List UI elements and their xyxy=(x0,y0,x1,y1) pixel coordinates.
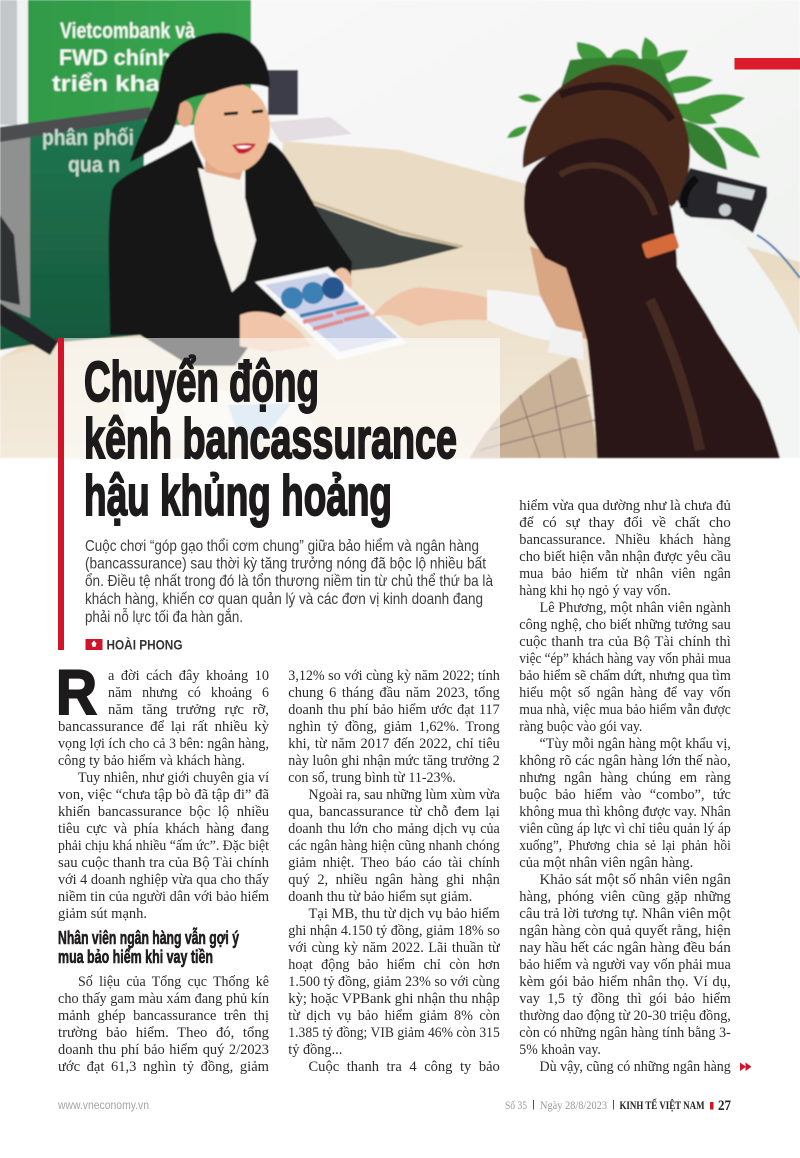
column 2 xyxy=(288,668,501,1075)
column 2: Cuộc thanh tra 4 công ty bảo xyxy=(308,1059,500,1075)
plant xyxy=(507,37,760,170)
intro text xyxy=(85,537,493,626)
footer issue info and page number xyxy=(505,1097,731,1114)
column 3: thường dao động từ 20-30 triệu đồng, xyxy=(519,1008,731,1024)
customer with ponytail xyxy=(470,138,780,458)
column 3: 5% khoản vay. xyxy=(519,1042,601,1058)
column 3: bancassurance. Nhiều khách hàng xyxy=(519,532,731,548)
column 2: qua, bancassurance từ chỗ đem lại xyxy=(288,804,500,820)
paragraph: statistics: doanh thu phí bảo hiểm quý 2/2023 xyxy=(58,1042,269,1058)
column 3: cuộc thanh tra của Bộ Tài chính thì xyxy=(519,634,731,650)
intro text: (bancassurance) sau thời kỳ tăng trưởng nóng đã bộc lộ nhiều bất xyxy=(85,556,487,572)
column 3: hàng khi họ ngỏ ý vay vốn. xyxy=(519,583,671,599)
subheading: mua bảo hiểm khi vay tiền xyxy=(58,947,213,967)
title: hậu khủng hoảng xyxy=(84,464,392,528)
paragraph: opening: công ty bảo hiểm và khách hàng. xyxy=(58,753,245,769)
paragraph: concerns xyxy=(58,770,270,922)
footer issue info and page number: 27 xyxy=(718,1098,731,1114)
drop cap: R xyxy=(56,658,97,728)
office chair: phân phối xyxy=(42,125,134,150)
column 2: chung 6 tháng đầu năm 2023, tổng xyxy=(288,685,500,701)
column 2: 3,12% so với cùng kỳ năm 2022; tính xyxy=(288,668,500,684)
paragraph: opening: a đời cách đây khoảng 10 xyxy=(108,668,269,684)
paragraph: statistics: mảnh ghép bancassurance trên thị xyxy=(58,1008,269,1024)
footer issue info and page number: KINH TẾ VIỆT NAM xyxy=(620,1097,704,1112)
paragraph: statistics xyxy=(58,974,270,1075)
desk phone xyxy=(677,168,800,278)
column 3: ngân hàng còn quả quyết rằng, hiện xyxy=(519,923,731,939)
paragraph: statistics: ước đạt 61,3 nghìn tỷ đồng, giảm xyxy=(58,1059,269,1075)
paragraph: opening: năm tăng trưởng rực rỡ, xyxy=(108,702,269,718)
paragraph: statistics: Số liệu của Tổng cục Thống kê xyxy=(78,974,269,990)
column 2: doanh thu từ bảo hiểm sụt giảm. xyxy=(288,889,472,905)
column 2: kỳ; hoặc VPBank ghi nhận thu nhập xyxy=(288,991,500,1007)
pointing hand and sleeve xyxy=(369,287,580,342)
column 3: của một nhân viên ngân hàng. xyxy=(519,855,693,871)
column 3: xuống”, Phương chia sẻ lại phản hồi xyxy=(519,838,731,854)
column 2: hoạt động bảo hiểm chỉ còn hơn xyxy=(288,957,500,973)
footer website: www.vneconomy.vn xyxy=(57,1100,149,1112)
intro text: Cuộc chơi “góp gạo thổi cơm chung” giữa bảo hiểm và ngân hàng xyxy=(85,537,479,555)
intro text: khách hàng, khiến cơ quan quản lý và các đơn vị kinh doanh đang xyxy=(85,591,483,608)
title xyxy=(84,350,457,528)
column 3: còn có những ngân hàng tính bằng 3- xyxy=(519,1025,731,1041)
column 3: Dù vậy, cũng có những ngân hàng xyxy=(540,1059,731,1075)
column 3: Lê Phương, một nhân viên ngành xyxy=(540,600,731,616)
column 3: câu trả lời tương tự. Nhân viên một xyxy=(519,906,732,922)
front desk xyxy=(0,247,800,458)
column 2: từ dịch vụ bảo hiểm giảm 8% còn xyxy=(288,1008,500,1024)
column 3 xyxy=(519,498,732,1075)
green banner: Vietcombank và xyxy=(60,18,196,43)
paragraph: concerns: với 4 doanh nghiệp vừa qua cho thấy xyxy=(58,872,270,888)
column 2: Ngoài ra, sau những lùm xùm vừa xyxy=(308,787,500,803)
column 2: nghìn tỷ đồng, giảm 1,62%. Trong xyxy=(288,719,500,735)
hero photo: bank staff advising customers xyxy=(0,0,800,458)
green banner: FWD chính xyxy=(59,45,171,70)
paragraph: concerns: von, việc “chưa tập bò đã tập đi” đã xyxy=(58,787,269,803)
column 2: con số, trung bình từ 11-23%. xyxy=(288,770,456,786)
paragraph: concerns: niềm tin của người dân với bảo hiểm xyxy=(58,889,269,905)
paragraph: opening: năm nhưng có khoảng 6 xyxy=(108,685,269,701)
subheading xyxy=(58,927,239,967)
column 3: ràng buộc vào gói vay. xyxy=(519,719,642,735)
paragraph: concerns: Tuy nhiên, như giới chuyên gia ví xyxy=(78,770,269,786)
column 3: kèm gói bảo hiểm nhân thọ. Ví dụ, xyxy=(519,974,731,990)
column 3: mua nhà, việc mua bảo hiểm vẫn được xyxy=(519,702,731,718)
papers on desk xyxy=(120,385,320,440)
column 2: tỷ đồng... xyxy=(288,1042,342,1058)
subheading: Nhân viên ngân hàng vẫn gợi ý xyxy=(58,927,239,948)
column 3: mua bảo hiểm từ nhân viên ngân xyxy=(519,566,731,582)
paragraph: concerns: phải chịu khá nhiều “ấm ức”. Đặc biệt xyxy=(58,838,270,854)
column 2: 1.500 tỷ đồng, giảm 23% so với cùng xyxy=(288,974,500,990)
title: kênh bancassurance xyxy=(84,407,457,471)
column 3: cho biết hiện vẫn nhận được yêu cầu xyxy=(519,549,731,565)
green banner: triển khai xyxy=(52,71,167,96)
red accent bar xyxy=(58,338,64,650)
column 3: hiểu một số ngân hàng để vay vốn xyxy=(519,685,731,701)
author byline: HOÀI PHONG xyxy=(106,638,182,652)
paragraph: opening: bancassurance để lại rất nhiều kỳ xyxy=(58,719,270,735)
column 3: bảo hiểm sẽ chấm dứt, nhưng qua tìm xyxy=(519,668,731,684)
column 3: không rõ các ngân hàng lớn thế nào, xyxy=(519,753,731,769)
column 3: “Tùy mỗi ngân hàng một khẩu vị, xyxy=(540,736,731,752)
column 2: doanh thu phí bảo hiểm ước đạt 117 xyxy=(288,702,500,718)
back desk xyxy=(0,141,800,458)
column 2: ghi nhận 4.150 tỷ đồng, giảm 18% so xyxy=(288,923,500,939)
paragraph: statistics: cho thấy gam màu xám đang phủ kín xyxy=(58,991,270,1007)
column 1 xyxy=(56,658,270,1075)
column 3: nhưng ngân hàng chúng em ràng xyxy=(519,770,731,786)
paragraph: concerns: giảm sút mạnh. xyxy=(58,906,147,922)
intro text: ổn. Điều tệ nhất trong đó là tổn thương niềm tin từ chủ thể thứ ba là xyxy=(85,572,493,590)
column 3: việc “ép” khách hàng vay vốn phải mua xyxy=(519,651,731,667)
column 2: này luôn ghi nhận mức tăng trưởng 2 xyxy=(288,753,500,769)
column 2: quý 2, nhiều ngân hàng ghi nhận xyxy=(288,872,500,888)
top right red tab xyxy=(734,58,800,70)
column 3: viên cũng áp lực vì chỉ tiêu quản lý áp xyxy=(519,821,731,837)
column 2: các ngân hàng hiện cũng nhanh chóng xyxy=(288,838,500,854)
office chair xyxy=(0,107,152,355)
column 3: vay 1,5 tỷ đồng thì gói bảo hiểm xyxy=(519,991,731,1007)
green banner xyxy=(28,0,251,125)
column 3: buộc bảo hiểm vào “combo”, tức xyxy=(519,787,731,803)
intro text: phải nỗ lực tối đa hàn gắn. xyxy=(85,607,243,626)
column 2: 1.385 tỷ đồng; VIB giảm 46% còn 315 xyxy=(288,1025,500,1041)
column 2: với cùng kỳ năm 2022. Lãi thuần từ xyxy=(288,940,501,956)
column 3: bảo hiểm và người vay vốn phải mua xyxy=(519,957,731,973)
footer issue info and page number: Ngày 28/8/2023 xyxy=(540,1098,607,1112)
paragraph: opening xyxy=(58,668,270,769)
column 3: không mua thì không được vay. Nhân xyxy=(519,804,731,820)
column 3: hiểm vừa qua dường như là chưa đủ xyxy=(519,498,731,514)
consultant woman xyxy=(109,33,352,366)
paragraph: concerns: tiêu cực và phía khách hàng đang xyxy=(58,821,270,837)
tablet xyxy=(240,267,407,360)
paragraph: concerns: sau cuộc thanh tra của Bộ Tài chính xyxy=(58,855,270,871)
paragraph: concerns: khiến bancassurance bộc lộ nhiều xyxy=(58,804,270,820)
column 3: hàng, phóng viên cũng gặp những xyxy=(519,889,731,905)
column 3: công nghệ, cho biết những tưởng sau xyxy=(519,617,731,633)
title: Chuyển động xyxy=(84,350,319,414)
column 3: nay hầu hết các ngân hàng đều bán xyxy=(519,940,731,956)
second customer with white shirt xyxy=(523,65,690,208)
column 2: giảm nhiệt. Theo báo cáo tài chính xyxy=(288,855,500,871)
column 2: Tại MB, thu từ dịch vụ bảo hiểm xyxy=(308,906,500,922)
white shirt xyxy=(640,205,800,458)
column 2: khi, từ năm 2017 đến 2022, chỉ tiêu xyxy=(288,736,500,752)
paragraph: opening: vọng lợi ích cho cả 3 bên: ngân hàng, xyxy=(58,736,269,752)
icon: continue arrows xyxy=(740,1062,752,1071)
office chair: qua n xyxy=(68,152,120,177)
column 2: doanh thu lớn cho mảng dịch vụ của xyxy=(288,821,500,837)
title backing panel xyxy=(64,338,500,458)
paragraph: statistics: trường bảo hiểm. Theo đó, tổng xyxy=(58,1025,270,1041)
column 3: Khảo sát một số nhân viên ngân xyxy=(540,872,731,888)
column 3: để có sự thay đổi về chất cho xyxy=(519,515,731,531)
footer issue info and page number: Số 35 xyxy=(505,1098,527,1112)
